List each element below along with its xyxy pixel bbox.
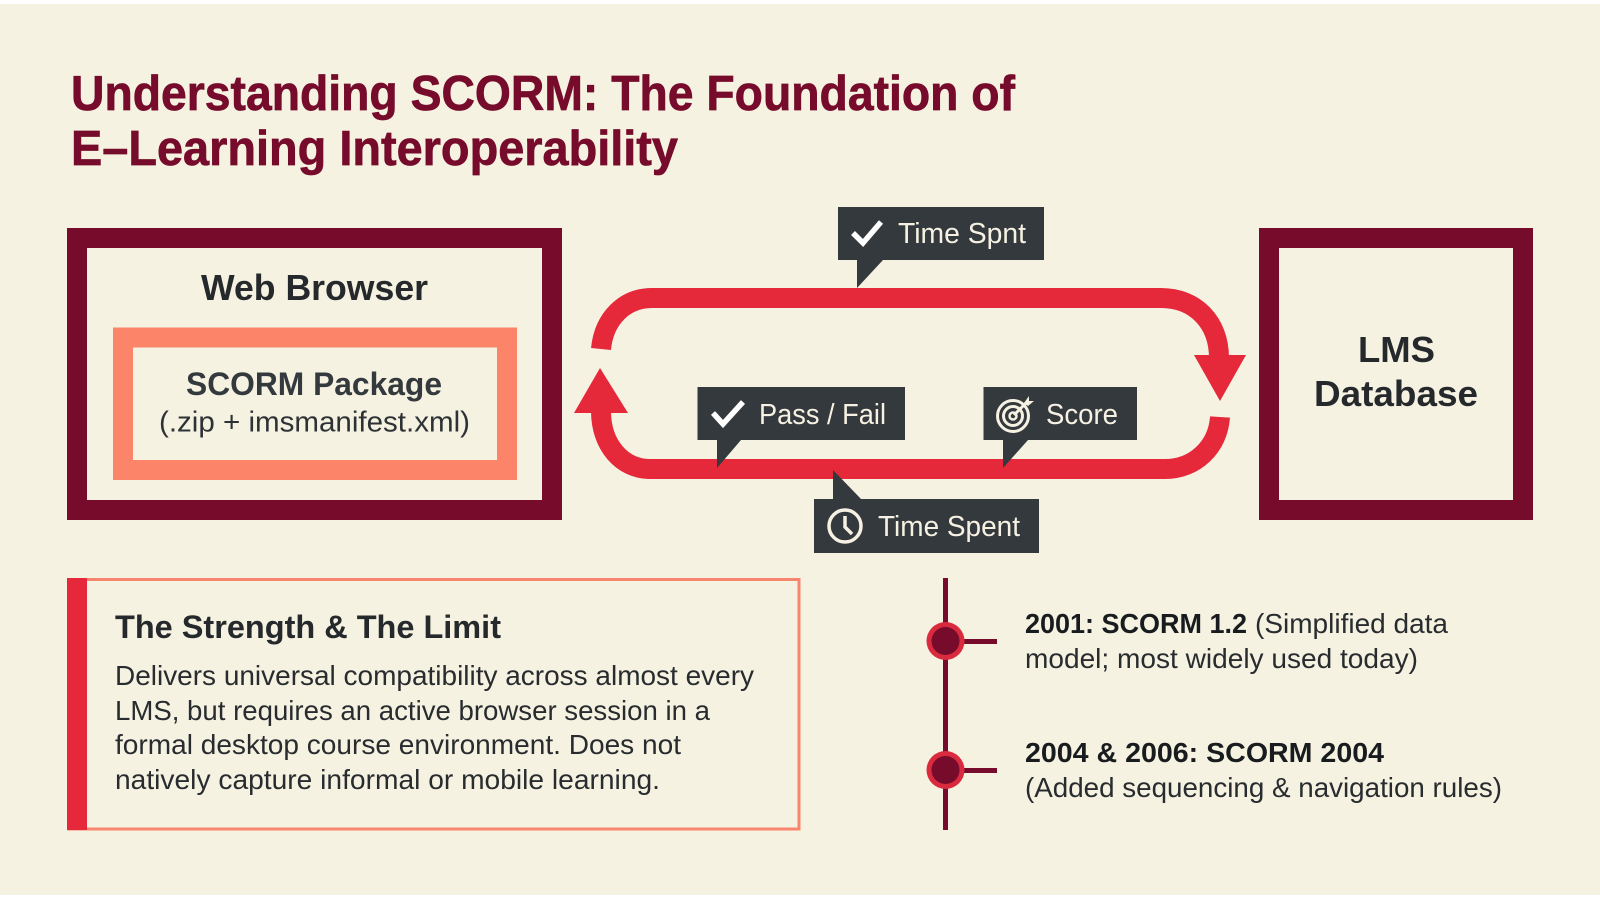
panel: web browser	[77, 238, 552, 510]
text block: scorm 1.2: 2001: SCORM 1.2	[1025, 608, 1247, 639]
text block: description: LMS, but requires an active browser session in a	[115, 695, 710, 726]
icon: clock	[829, 510, 861, 542]
text block: scorm 2004: (Added sequencing & navigation rules)	[1025, 772, 1502, 803]
text block: scorm 1.2: model; most widely used today)	[1025, 643, 1418, 674]
callout: time spnt: Time Spnt	[898, 218, 1026, 250]
icon: check	[713, 402, 743, 424]
title	[71, 67, 1016, 176]
text block: scorm 2004	[1025, 737, 1502, 803]
heading: web browser: Web Browser	[201, 267, 428, 308]
icon: check	[853, 222, 881, 243]
panel: scorm package: (.zip + imsmanifest.xml)	[159, 406, 470, 438]
callout: time spnt	[838, 207, 1044, 288]
panel: lms database: LMS	[1358, 329, 1435, 370]
panel: lms database: Database	[1314, 373, 1478, 414]
text block: description	[115, 660, 754, 795]
timeline marker: 2001	[926, 622, 997, 660]
title: E–Learning Interoperability	[71, 122, 678, 176]
heading: strength and limit: The Strength & The Limit	[115, 609, 501, 645]
text block: description: formal desktop course environment. Does not	[115, 729, 681, 760]
panel: scorm package: SCORM Package	[186, 366, 442, 402]
callout: pass / fail	[698, 387, 905, 468]
panel: lms database	[1269, 238, 1523, 510]
text block: scorm 1.2	[1025, 608, 1448, 674]
text block: description: natively capture informal or mobile learning.	[115, 764, 660, 795]
callout: pass / fail: Pass / Fail	[759, 399, 886, 431]
timeline marker: 2004	[926, 751, 997, 789]
text block: description: Delivers universal compatibility across almost every	[115, 660, 754, 691]
panel: scorm package	[123, 338, 507, 470]
timeline	[926, 578, 997, 830]
callout: score	[984, 387, 1137, 468]
icon: target	[998, 396, 1034, 432]
arrow: bottom, LMS to browser	[574, 368, 1220, 469]
text block: scorm 2004: 2004 & 2006: SCORM 2004	[1025, 737, 1384, 768]
panel: the strength and the limit	[67, 578, 799, 830]
callout: time spent: Time Spent	[878, 511, 1020, 543]
title: Understanding SCORM: The Foundation of	[71, 67, 1016, 121]
text block: scorm 1.2: (Simplified data	[1255, 608, 1448, 639]
arrow: top, browser to LMS	[601, 298, 1246, 401]
callout: time spent	[814, 470, 1039, 553]
callout: score: Score	[1046, 399, 1118, 431]
